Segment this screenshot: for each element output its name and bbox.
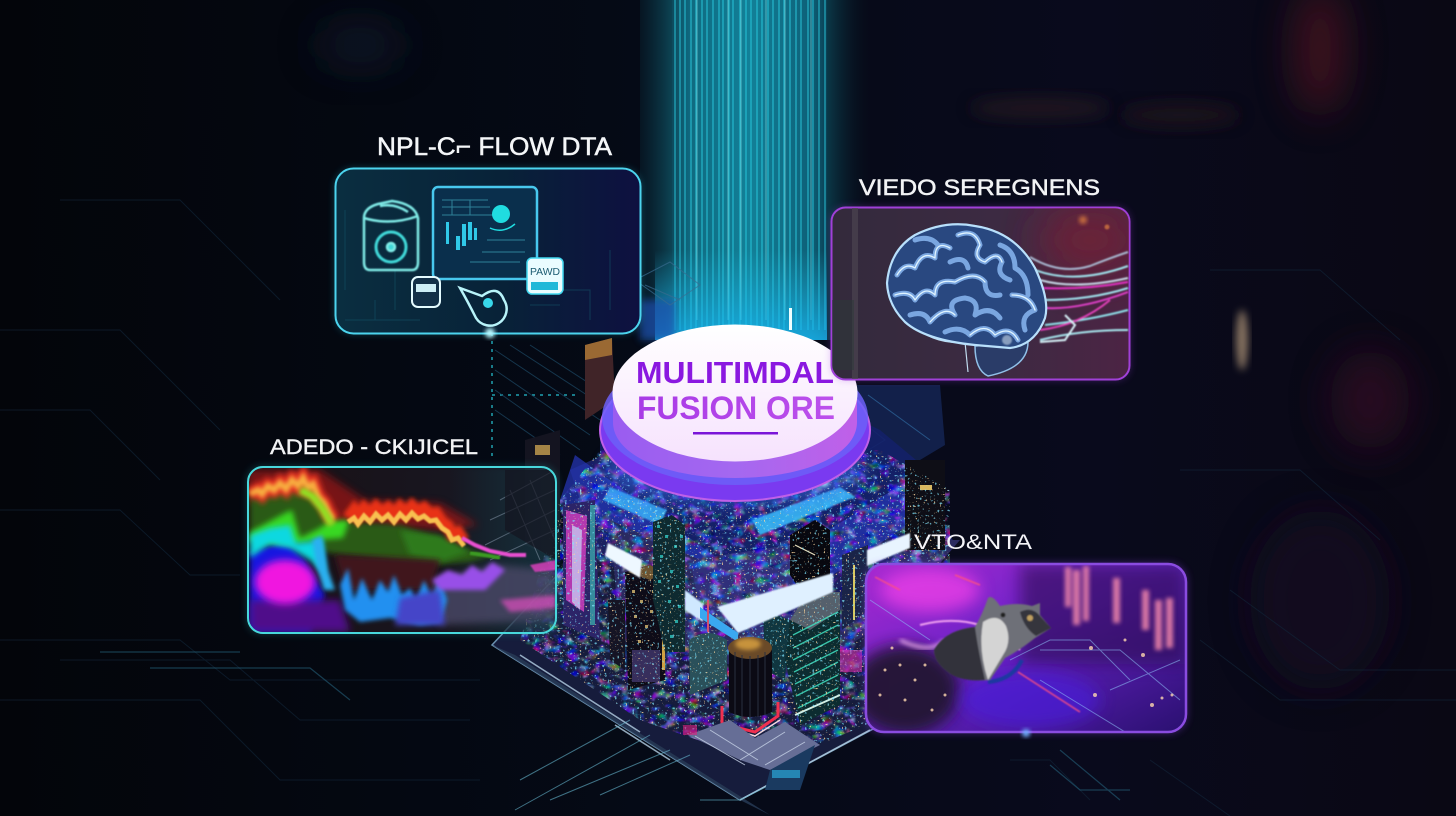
panel: audio spectrum [247,435,557,634]
sparkling lights [522,450,950,744]
hatched glass left of core [495,345,615,455]
lit middle of the city [610,520,960,680]
red haze [248,470,478,530]
disc top [612,324,858,462]
icon: storage jar [364,201,418,270]
icon: data chip [527,258,563,294]
heading: ADEDO - CKIJICEL [270,435,478,459]
building seen through the glass [485,470,555,560]
teal striped right tower [785,590,840,725]
core disc [600,324,870,506]
crest: right [348,506,464,541]
heading: NPL-C⌐ FLOW DTA [377,133,612,161]
glowing white-blue strips [605,543,642,578]
drum building [689,633,727,695]
blue fill [250,540,325,632]
panel: video / brain [831,175,1140,380]
teal dotted tower [653,515,685,652]
teal annex tower [763,610,790,680]
dark red mid [335,555,440,590]
buildings left [563,500,600,640]
panel: VTO data [850,531,1187,737]
crest: magenta tail [462,538,526,555]
connector: NLP panel to core [492,333,580,460]
core subtitle: FUSION ORE [637,390,835,426]
platform base [492,540,965,800]
heading: VTO&NTA [914,531,1032,554]
core title: MULITIMDAL [636,355,834,390]
light dots [878,638,1174,712]
panel: NLP flow data [335,133,641,338]
cyan band [250,525,325,575]
magenta accents [840,650,862,672]
crest: left [250,478,333,520]
light beam [635,0,871,340]
dark right towers [790,520,830,590]
purple tail [432,562,505,590]
icon: bus [412,277,440,307]
red neon ring base [722,702,778,732]
disc side [613,392,857,478]
icon: brain [887,224,1046,376]
heading: VIEDO SEREGNENS [859,175,1100,200]
upper block [570,395,955,660]
pink light bars [1065,566,1173,650]
circuit traces below platform [515,720,800,810]
icon: data chip: PAWD [530,267,560,278]
small building [608,600,625,670]
green spike [250,510,350,545]
mottled city texture [520,450,950,744]
icon: dog [934,597,1051,682]
magenta blob [255,560,315,604]
dark green band [250,488,490,565]
circuit traces [875,575,1080,712]
blue/teal spikes [340,568,447,625]
nerve lines [1030,252,1128,342]
outer ring [600,359,870,501]
tall dark tower [625,565,665,690]
black rotunda tower [729,642,772,717]
city platform [490,338,970,815]
icon: dashboard window [433,187,537,279]
icon: flame circle [460,288,507,326]
